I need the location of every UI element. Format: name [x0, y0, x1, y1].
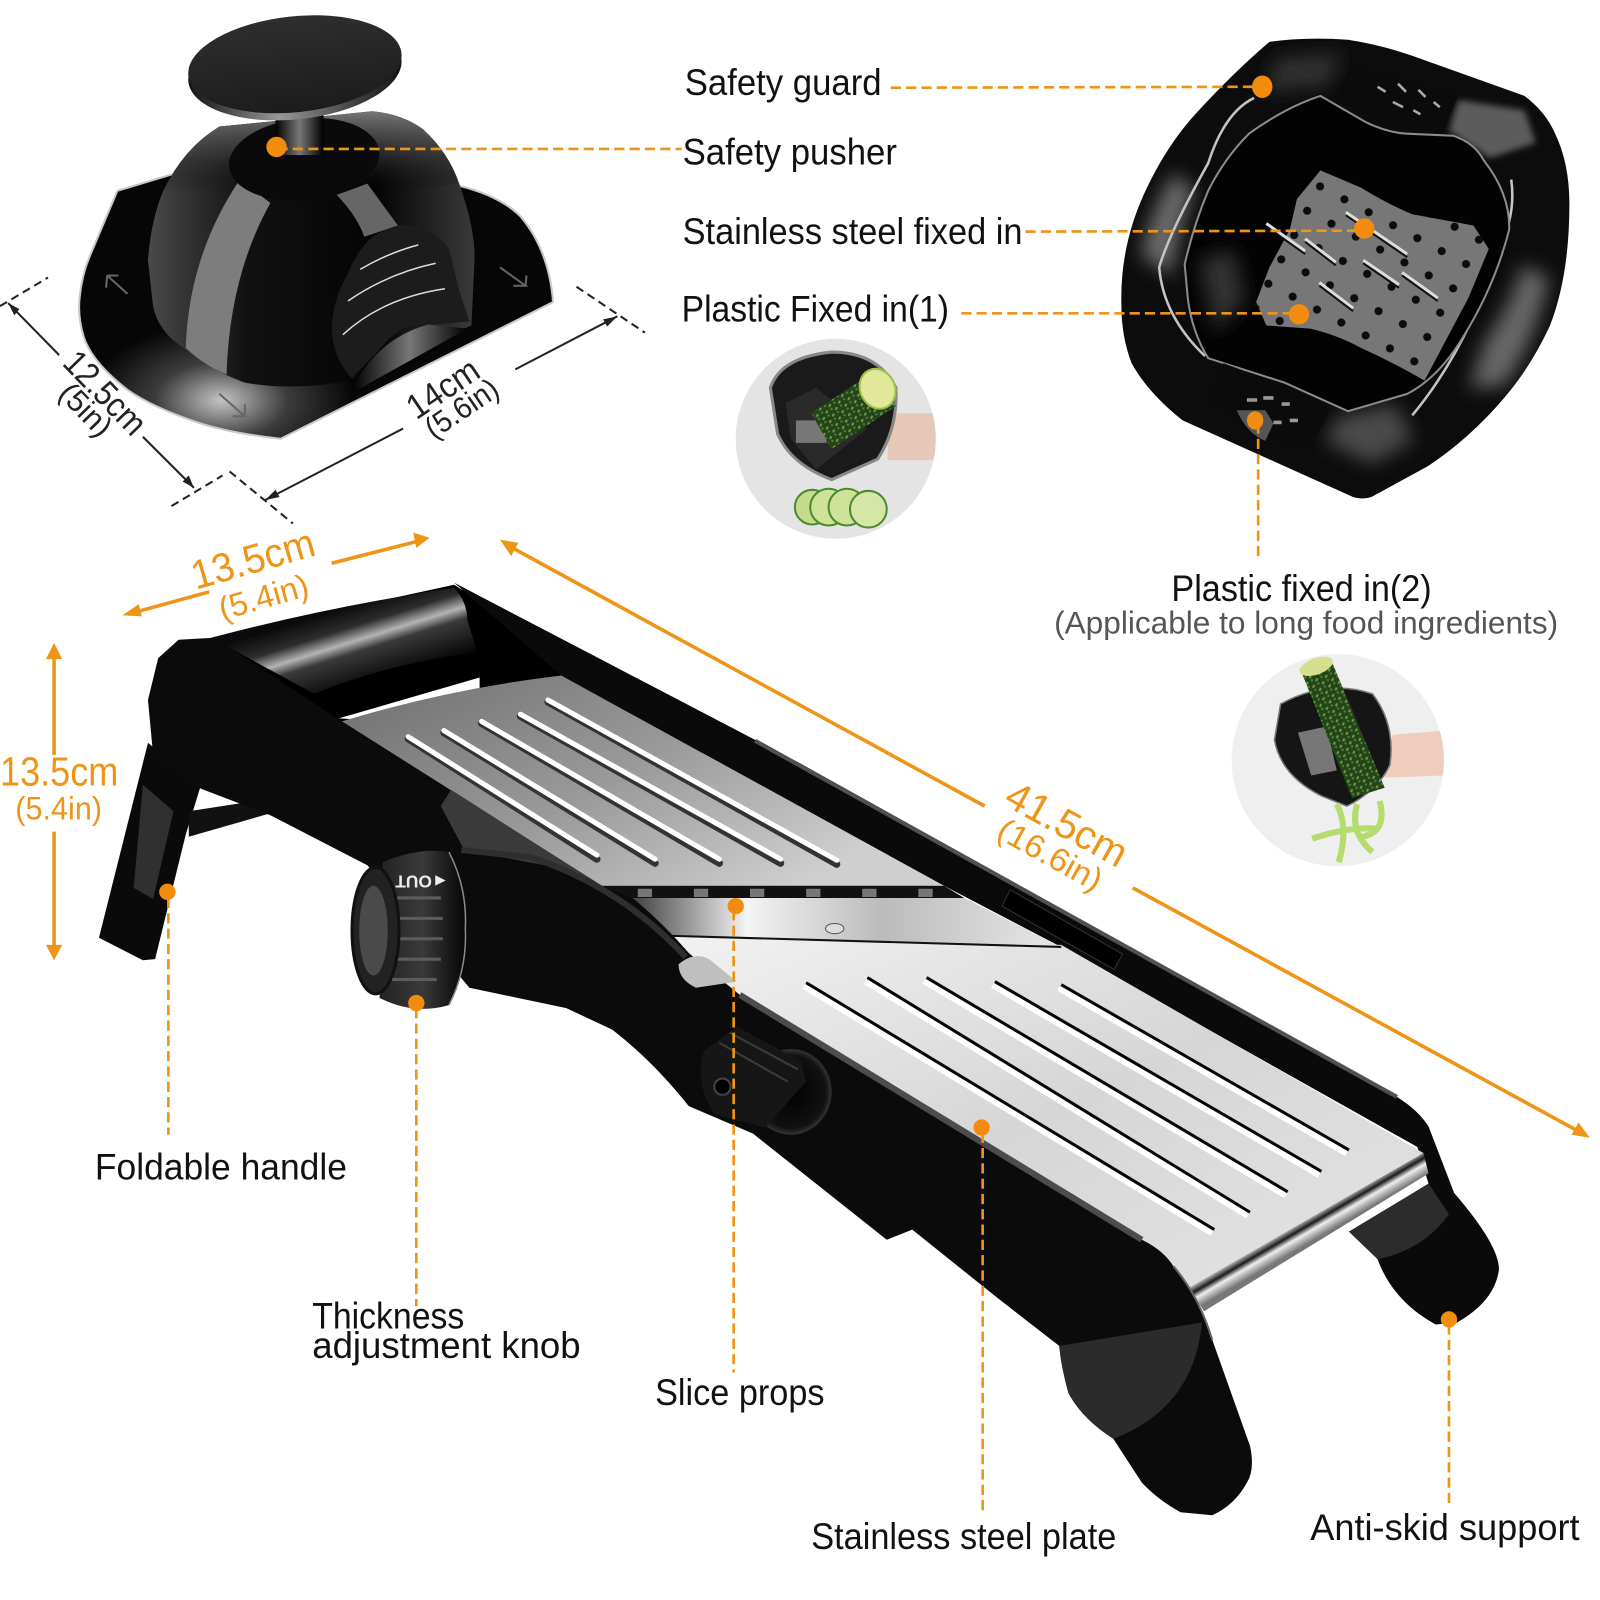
- dome highlight stripe: [186, 180, 270, 374]
- ribbons: [1312, 801, 1382, 862]
- safety pusher product: [79, 5, 553, 439]
- callout: plastic fixed in 1: Plastic Fixed in(1): [682, 288, 949, 329]
- cucumber: [1300, 661, 1385, 798]
- plastic fixed in 2 label: (Applicable to long food ingredients): [1054, 605, 1558, 641]
- collar: [225, 111, 383, 208]
- dimension: 13.5cm height: [0, 643, 118, 960]
- far rail: [454, 583, 1499, 1324]
- base cylinder highlight: [352, 324, 467, 393]
- callout: slice props: Slice props: [655, 1372, 824, 1413]
- safety guard product: [1121, 39, 1569, 498]
- disc top: [183, 5, 406, 123]
- usage photo: cucumber slices: [735, 337, 939, 541]
- near rail and side body: [148, 638, 1252, 1515]
- callout: thickness adjustment knob: Thickness: [312, 1296, 464, 1337]
- far rail grey edge: [755, 741, 1397, 1097]
- guard thin rim line: [1159, 98, 1512, 415]
- slider knob shadow: [750, 1049, 832, 1135]
- dimension: 13.5cm width: (5.4in): [214, 566, 313, 627]
- guard inner cavity: [1185, 96, 1509, 411]
- cavity wall shade: [1199, 250, 1245, 332]
- silver tab: [679, 956, 737, 988]
- callout: anti-skid support: [1310, 1311, 1580, 1548]
- rear foot cap: [1349, 1184, 1449, 1259]
- disc rim: [183, 10, 407, 130]
- slice slider knob: [701, 1027, 806, 1128]
- rail sparkle: [1173, 1266, 1212, 1340]
- blade strip: [602, 886, 964, 898]
- dimension: 13.5cm width: [122, 519, 430, 627]
- thickness knob: ◄OUT: [395, 872, 449, 892]
- foldable handle leg: [99, 743, 270, 960]
- callout: foldable handle: Foldable handle: [95, 1147, 347, 1188]
- near rail grey edge: [740, 995, 1142, 1240]
- dimension: 41.5cm length: 41.5cm: [998, 772, 1136, 876]
- callout: slice props: [655, 898, 824, 1413]
- white gap below roller: [339, 678, 480, 719]
- dimension: 13.5cm height: 13.5cm: [0, 749, 118, 795]
- pusher base: [79, 163, 553, 439]
- lower plate slots: [804, 978, 1349, 1233]
- bottom window: [1208, 363, 1331, 444]
- lower steel plate: [668, 937, 1423, 1288]
- hinge on far rail: [1002, 890, 1122, 969]
- plate underside shade: [441, 790, 600, 885]
- leader: plastic fixed in 2: [1247, 411, 1263, 559]
- dimension: 12.5cm: 12.5cm: [55, 343, 154, 443]
- callout: safety guard: Safety guard: [685, 62, 882, 103]
- dimension: 41.5cm length: (16.6in): [992, 810, 1109, 898]
- guard light bands: [1141, 53, 1549, 464]
- dimension: 13.5cm height: (5.4in): [15, 789, 102, 826]
- dimension: 14cm: (5.6in): [419, 372, 505, 446]
- callout: stainless steel plate: [811, 1119, 1116, 1557]
- dimension: 41.5cm length: [500, 540, 1590, 1138]
- dimension: 14cm: [230, 287, 645, 523]
- dimension: 13.5cm width: 13.5cm: [186, 519, 320, 598]
- dimension: 14cm: 14cm: [400, 351, 487, 427]
- callout: stainless steel fixed in: Stainless steel fixed in: [683, 211, 1022, 252]
- base arrows: [106, 267, 527, 416]
- hand: [1383, 731, 1445, 778]
- ramp with ridges: [332, 225, 469, 379]
- plastic fixed in 2 label: [1054, 568, 1558, 641]
- blades: [1266, 212, 1438, 308]
- callout: foldable handle: [95, 884, 347, 1188]
- guard outer shell: [1121, 39, 1569, 498]
- slices: [794, 488, 820, 526]
- callout: anti-skid support: Anti-skid support: [1310, 1507, 1580, 1548]
- steel rod: [1189, 1153, 1429, 1311]
- callout: stainless steel plate: Stainless steel plate: [811, 1516, 1116, 1557]
- roller handle: [211, 588, 478, 694]
- upper steel plate: [342, 676, 944, 886]
- mini guard: [1274, 688, 1391, 806]
- mandoline slicer: [99, 583, 1499, 1515]
- leader: plastic fixed in 1: [961, 304, 1309, 324]
- leader: stainless steel fixed in: [1026, 218, 1374, 239]
- top window: [1336, 65, 1458, 132]
- cucumber: [811, 381, 896, 449]
- upper plate slots: [408, 700, 837, 864]
- usage photo: cucumber strips: [1230, 653, 1446, 867]
- plastic fixed in 2 label: Plastic fixed in(2): [1171, 568, 1432, 609]
- callout: thickness adjustment knob: [312, 995, 581, 1366]
- callout: safety pusher: Safety pusher: [683, 131, 897, 172]
- leader: safety pusher: [266, 137, 682, 157]
- dimension: 12.5cm: (5in): [52, 376, 119, 444]
- leader: safety guard: [891, 76, 1272, 98]
- background circle: [735, 337, 939, 541]
- cavity behind roller: [211, 585, 714, 811]
- front foot cap shading: [1059, 1322, 1202, 1439]
- near rail upper strip: [461, 850, 686, 957]
- mini guard: [770, 352, 896, 480]
- dimension: 12.5cm: [0, 278, 222, 506]
- shaft: [276, 114, 323, 155]
- background circle: [1230, 653, 1446, 867]
- thickness knob: [352, 851, 466, 1009]
- callout: thickness adjustment knob: adjustment knob: [312, 1325, 581, 1366]
- hand: [888, 413, 939, 460]
- pusher dome: [148, 111, 475, 386]
- perforated steel plate: [1256, 170, 1489, 381]
